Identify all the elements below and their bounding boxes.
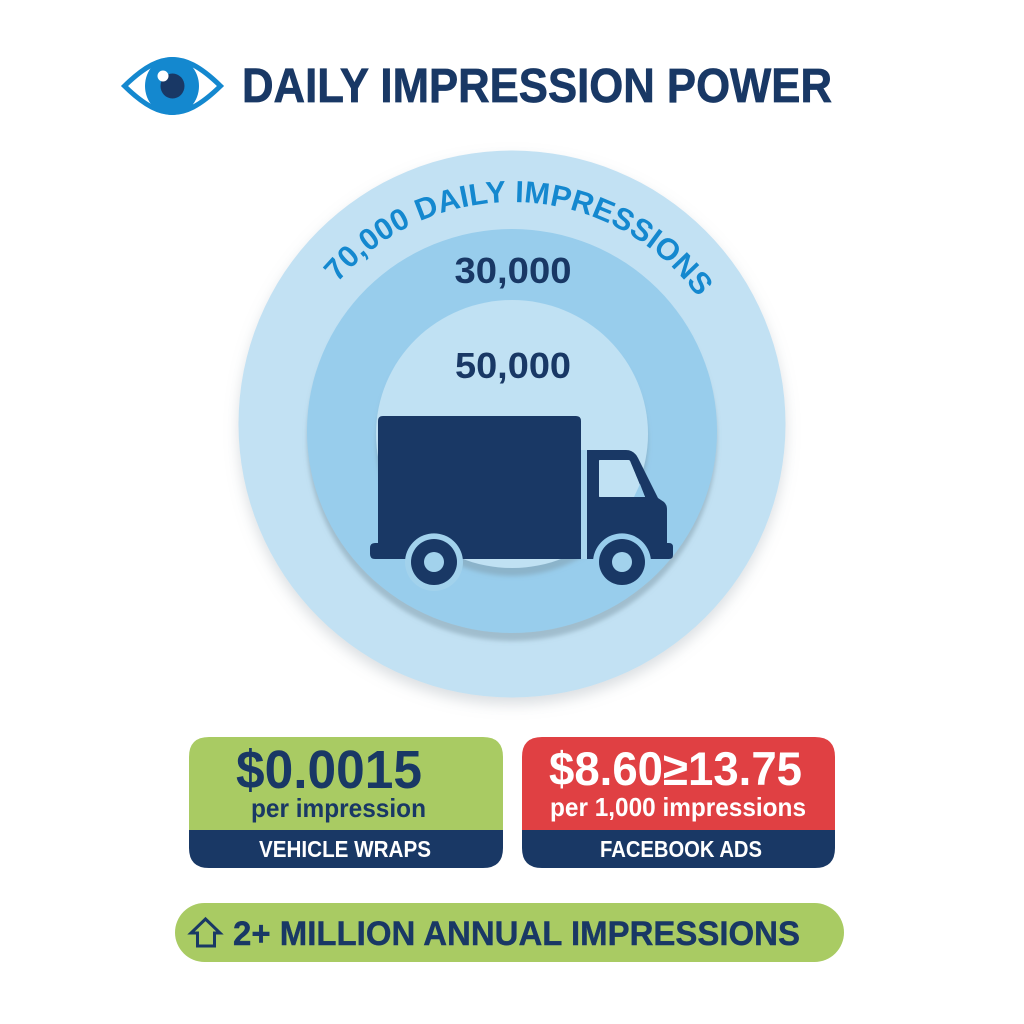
card: vehicle wraps [189,737,503,868]
concentric impressions chart [234,150,790,710]
rear wheel [411,539,457,585]
header [124,57,832,115]
label: FACEBOOK ADS [600,836,762,862]
label: 50,000: 50,000 [455,345,571,386]
middle circle: 30,000 [307,229,717,633]
outer circle: 70,000 [234,150,790,710]
banner text: 2+ MILLION ANNUAL IMPRESSIONS [233,915,800,953]
price: $0.0015 [236,740,422,800]
icon: up arrow [191,919,220,946]
inner circle: 50,000 [376,300,648,568]
curved label: 70,000 DAILY IMPRESSIONS [322,181,712,294]
front wheel [599,539,645,585]
label: VEHICLE WRAPS [259,836,431,862]
label: 30,000: 30,000 [454,250,572,291]
price: $8.60≥13.75 [549,742,802,795]
icon: eye [124,57,220,115]
unit: per 1,000 impressions [550,792,806,822]
unit: per impression [251,793,426,823]
card: facebook ads [522,737,835,868]
banner: annual impressions [175,903,844,962]
title: DAILY IMPRESSION POWER [242,60,832,113]
icon: delivery truck [370,416,673,591]
